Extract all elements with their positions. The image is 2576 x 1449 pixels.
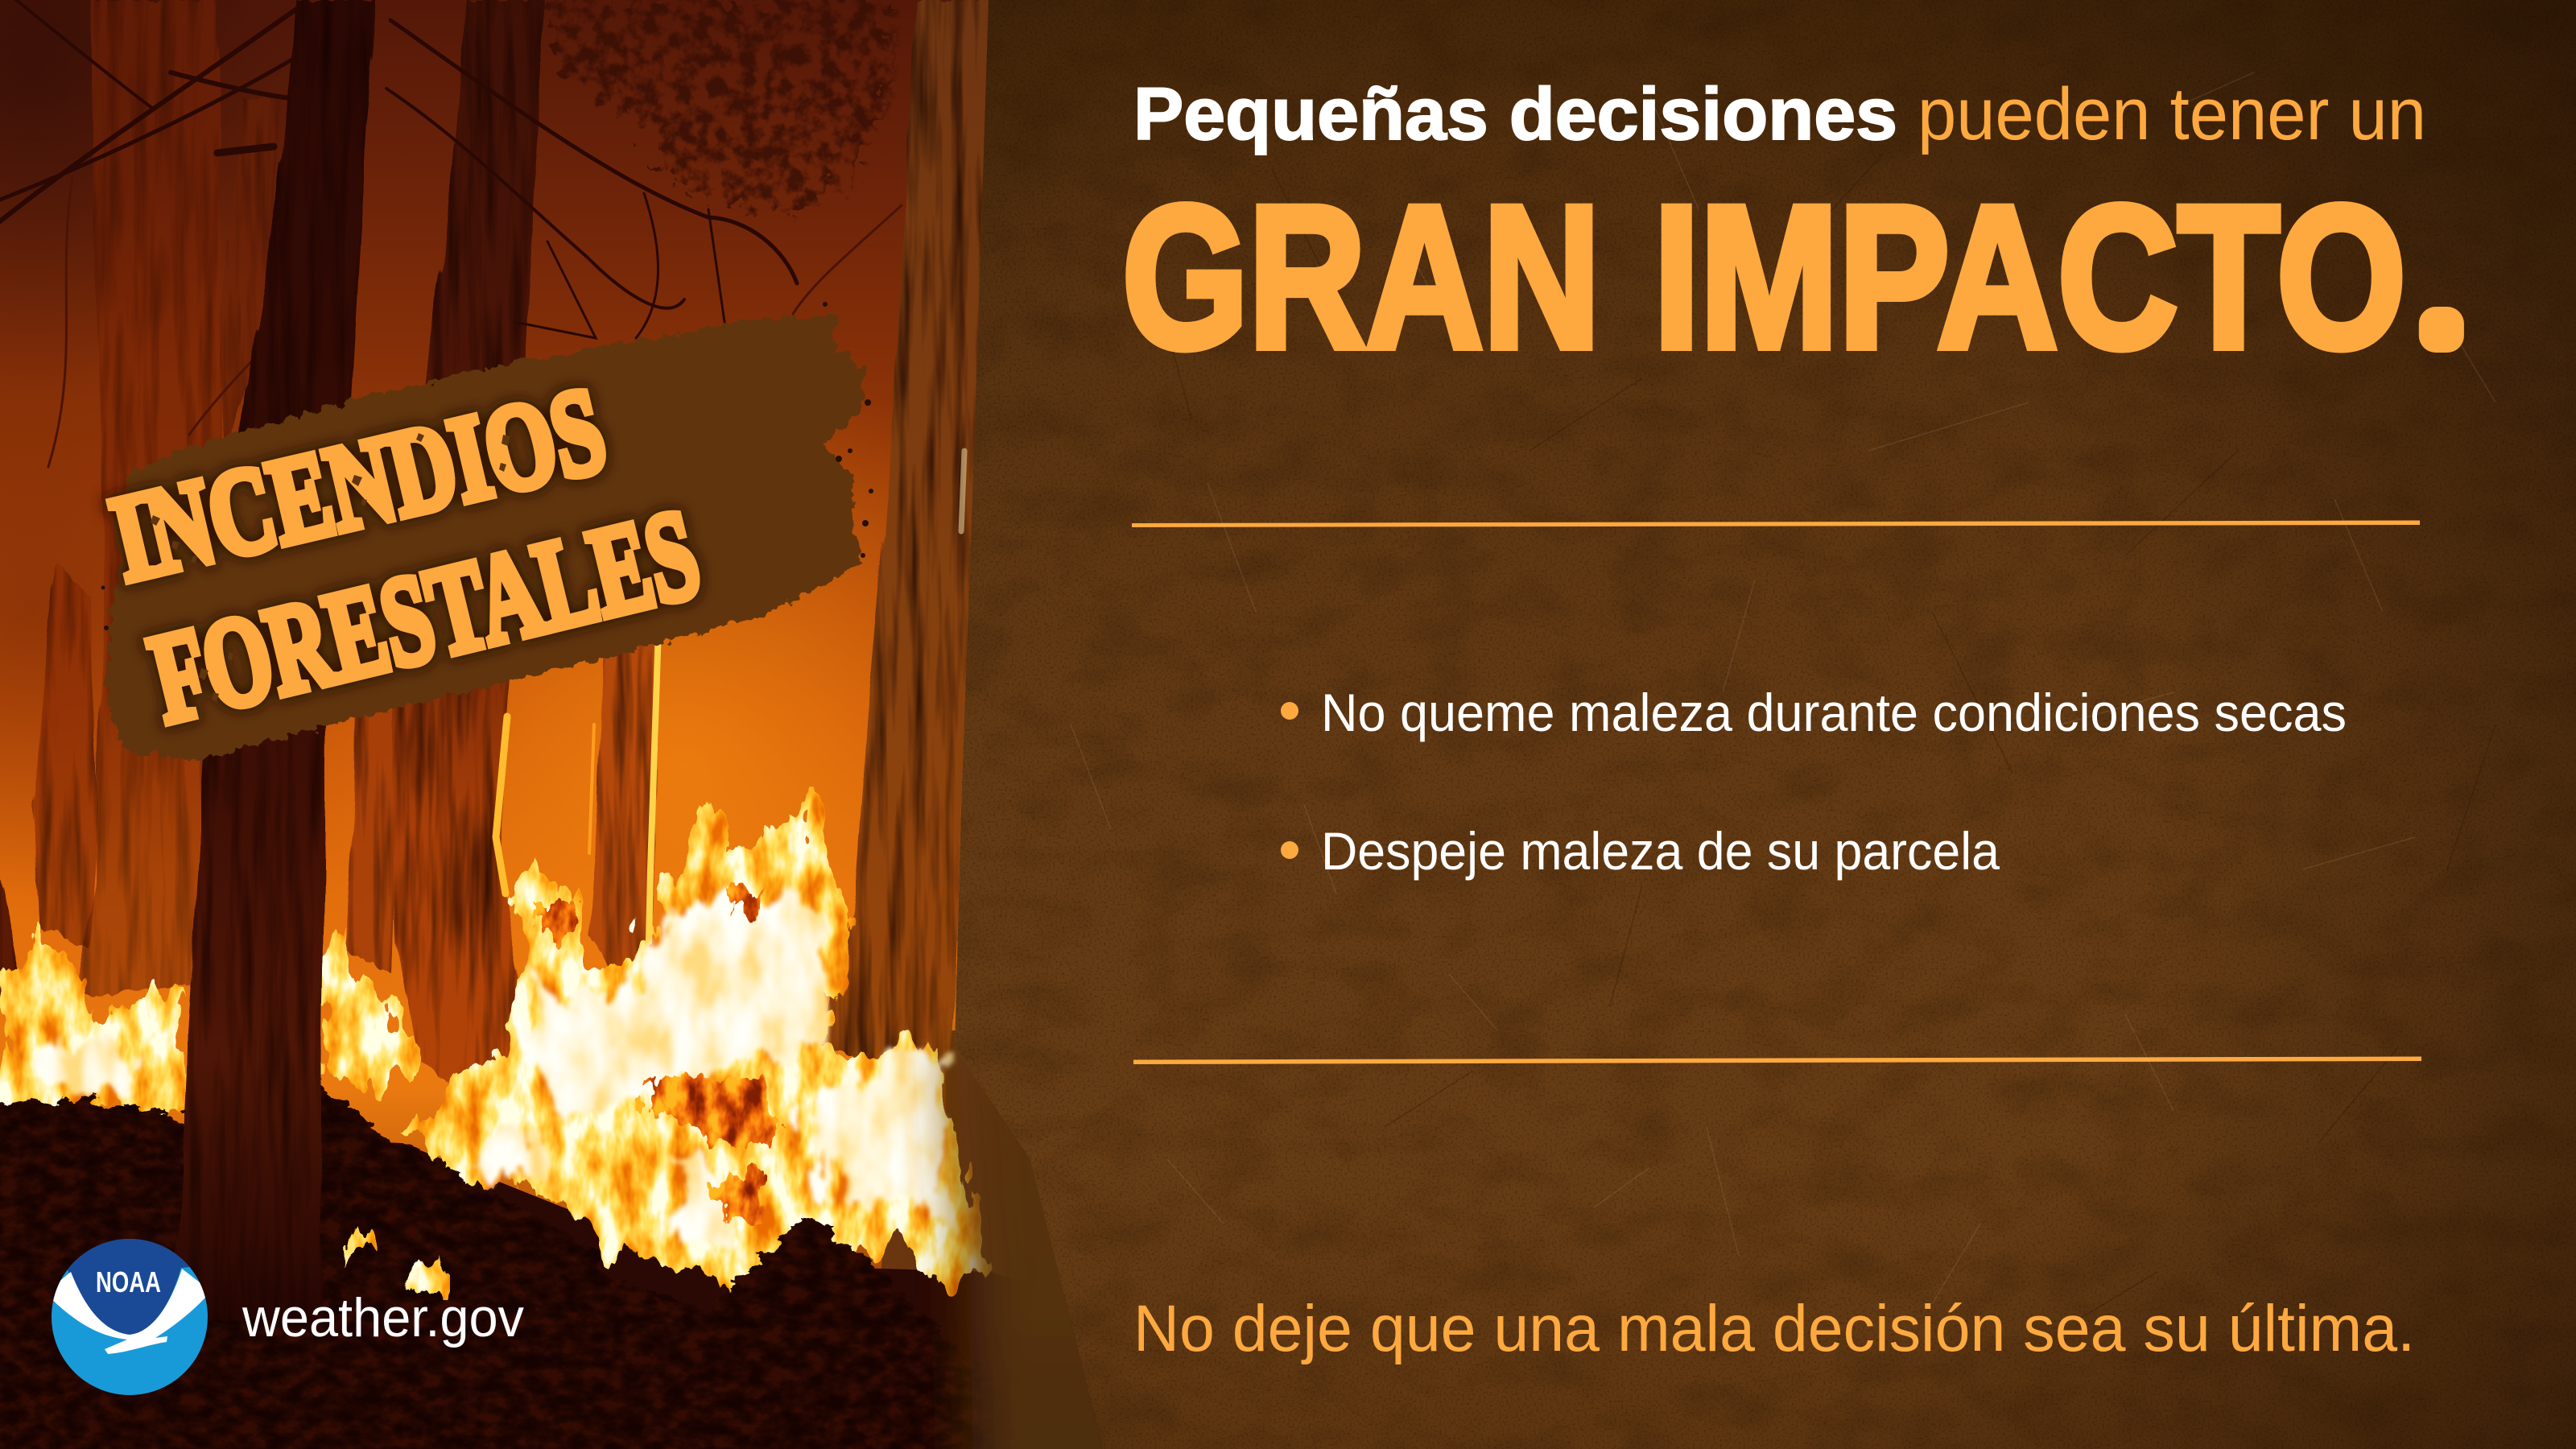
dark base under flames (0, 1127, 1208, 1449)
heading: GRAN IMPACTO: . (2430, 263, 2453, 353)
bullet list (1281, 683, 2347, 881)
top divider (1132, 520, 2420, 527)
branches (0, 0, 902, 467)
fire: flames (0, 789, 992, 1304)
NOAA wordmark: NOAA (96, 1265, 161, 1298)
bullet two dot (1281, 841, 1298, 859)
heading: GRAN IMPACTO: IMPACTO (1653, 164, 2406, 390)
bullet one dot (1281, 702, 1298, 720)
bullet two text: Despeje maleza de su parcela (1321, 821, 2000, 881)
banner line two: FORESTALES (138, 483, 712, 750)
thin bright edges on trunks (496, 451, 964, 942)
banner line one: INCENDIOS (100, 361, 617, 607)
closing message: No deje que una mala decisión sea su última. (1133, 1292, 2415, 1365)
dark blue upper field (40, 1232, 219, 1335)
heading: GRAN IMPACTO (1122, 164, 2453, 390)
background tree trunks (0, 0, 989, 1113)
photo: burning forest at night (0, 0, 1256, 1449)
website label: weather.gov (242, 1287, 524, 1348)
white bird swoosh (45, 1269, 211, 1354)
dark foliage (547, 0, 902, 217)
burning patches inside flames (539, 881, 785, 1228)
forest floor (0, 1071, 1208, 1449)
bottom divider (1133, 1056, 2421, 1064)
fire: glowing white core (32, 890, 952, 1236)
bullet one text: No queme maleza durante condiciones secas (1321, 683, 2347, 742)
heading: lead-in regular: pueden tener un (1918, 73, 2426, 155)
smoky orange sky (0, 0, 1085, 1376)
ink specks (101, 302, 873, 630)
NOAA logo (40, 1232, 219, 1395)
embers (346, 1225, 442, 1292)
heading: GRAN IMPACTO: GRAN (1122, 164, 1600, 390)
heading: lead-in bold: Pequeñas decisiones (1133, 73, 1897, 155)
stencil wear (151, 433, 510, 702)
photo fade into background (955, 1038, 1256, 1449)
banner: Incendios Forestales (100, 302, 873, 761)
foreground dark trunk (169, 0, 375, 1320)
brush stroke shape (105, 316, 865, 761)
